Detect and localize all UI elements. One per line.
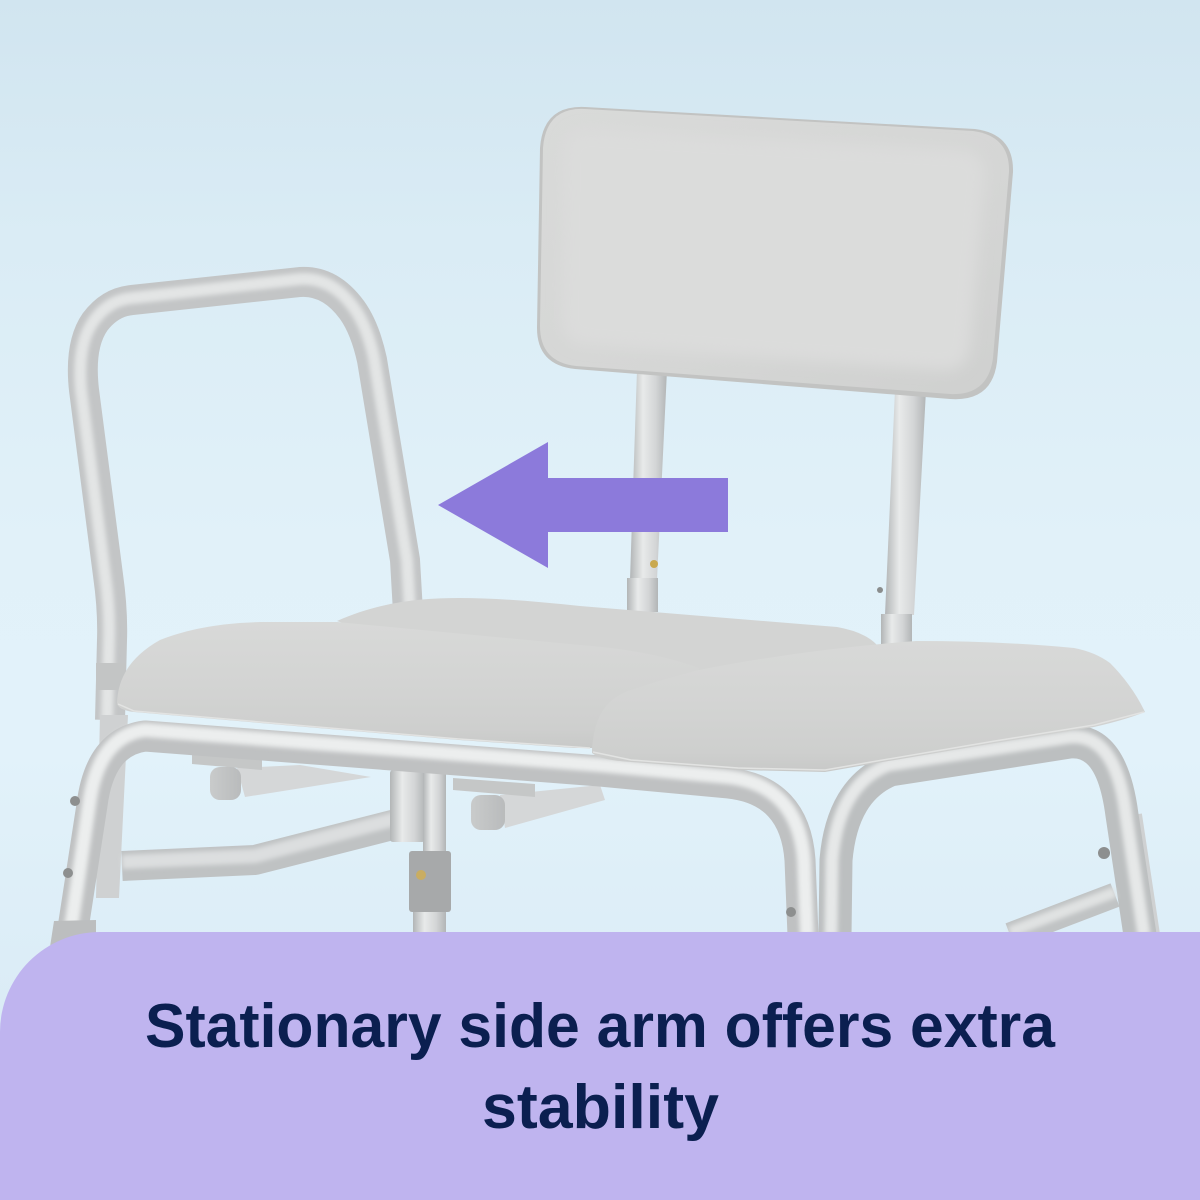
back support posts: [627, 370, 926, 648]
frame screws: [63, 796, 1110, 917]
front frame: [70, 730, 807, 935]
backrest cushion: [537, 107, 1013, 399]
stationary side arm: [80, 279, 410, 720]
center leg and adjuster: [390, 770, 451, 935]
caption line 1: Stationary side arm offers extra: [145, 992, 1055, 1061]
caption panel: [0, 932, 1200, 1200]
seat latch left: [192, 752, 371, 800]
caption line 2: stability: [482, 1073, 720, 1142]
side arm clamp: [96, 663, 126, 690]
seat latch center: [453, 778, 605, 830]
left seat seam: [118, 704, 590, 748]
left leg tip: [50, 920, 96, 947]
cross bar: [122, 815, 412, 866]
arrow pointing left: [438, 442, 728, 568]
right seat cushion: [592, 641, 1145, 772]
rear inner leg: [96, 715, 128, 898]
right seat seam: [593, 712, 1144, 770]
chair: [50, 107, 1150, 947]
rear seat cushion: [337, 598, 877, 680]
left seat cushion: [117, 622, 700, 748]
rear right frame: [831, 737, 1150, 935]
